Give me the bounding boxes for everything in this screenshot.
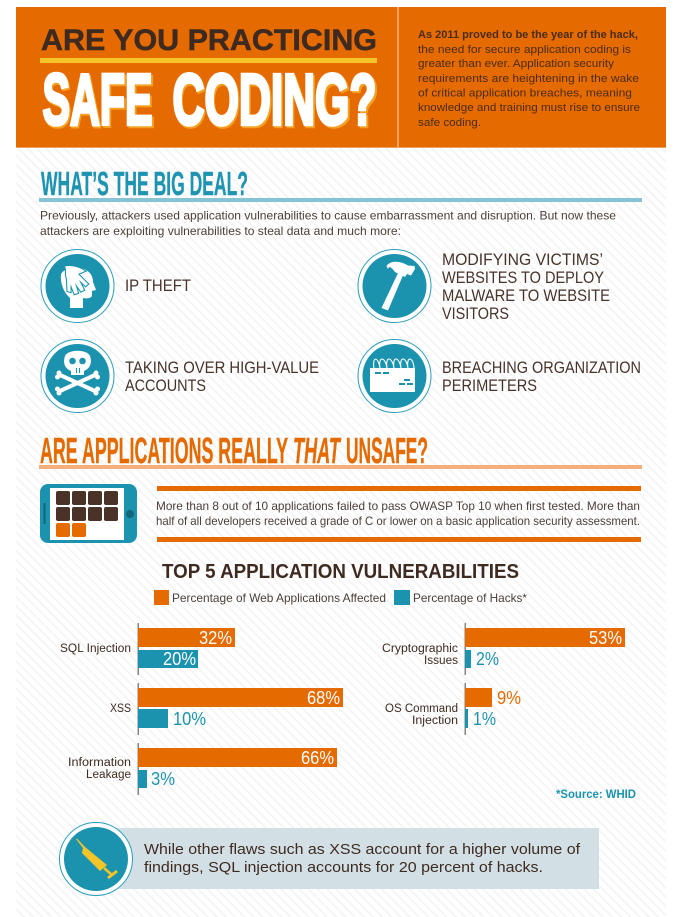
bars: os command injection: Injection bbox=[412, 715, 458, 727]
text block: intro: safe coding. bbox=[418, 117, 481, 129]
axes bbox=[138, 623, 466, 795]
label: breaching perimeters bbox=[442, 359, 641, 395]
panel: title banner bbox=[16, 7, 666, 148]
bars: sql injection bbox=[60, 628, 235, 669]
source note: *Source: WHID bbox=[556, 789, 636, 801]
text: takeaway bbox=[144, 841, 581, 876]
label: modifying websites: WEBSITES TO DEPLOY bbox=[442, 269, 604, 287]
section: are applications really that unsafe bbox=[39, 430, 642, 543]
bars: information leakage: 66% bbox=[301, 748, 334, 768]
text block: intro: As 2011 proved to be the year of the hack, bbox=[418, 29, 638, 41]
bars: cryptographic issues: 53% bbox=[589, 628, 622, 648]
heading: safe coding: SAFE bbox=[42, 60, 152, 140]
heading: safe coding: CODING? bbox=[174, 62, 378, 142]
text block: summary: Previously, attackers used application vulnerabilities to cause embarrassment and disruption. But now these bbox=[40, 208, 616, 222]
bars: xss: XSS bbox=[110, 703, 131, 715]
bars: os command injection: OS Command bbox=[385, 703, 458, 715]
bars: cryptographic issues: 2% bbox=[476, 649, 499, 669]
section: are applications really that unsafe: UNSAFE? bbox=[346, 430, 428, 471]
heading: what's the big deal: WHAT’S THE BIG DEAL? bbox=[41, 165, 248, 202]
label: modifying websites: VISITORS bbox=[442, 305, 509, 323]
text: takeaway: While other flaws such as XSS account for a higher volume of bbox=[144, 841, 581, 858]
bars: xss bbox=[110, 688, 343, 729]
icon: tablet bbox=[40, 484, 137, 543]
callout: owasp statistic bbox=[156, 486, 641, 542]
section: what's the big deal bbox=[39, 165, 642, 412]
legend: Percentage of Hacks* bbox=[413, 591, 527, 605]
bars: sql injection: 32% bbox=[199, 628, 232, 648]
callout: owasp statistic: half of all developers received a grade of C or lower on a basic application security assessment. bbox=[156, 514, 640, 528]
heading: safe coding bbox=[42, 60, 378, 142]
bars: information leakage: Information bbox=[68, 757, 131, 769]
legend bbox=[154, 590, 527, 605]
label: taking over accounts: TAKING OVER HIGH-VALUE bbox=[125, 359, 319, 377]
label: ip theft: IP THEFT bbox=[125, 277, 191, 295]
heading: are applications really that unsafe: THAT bbox=[293, 430, 342, 471]
text block: intro: knowledge and training must rise to ensure bbox=[418, 102, 640, 114]
bars: information leakage bbox=[68, 748, 337, 789]
bars: cryptographic issues: Cryptographic bbox=[382, 643, 458, 655]
bars: os command injection bbox=[385, 688, 521, 729]
callout: owasp statistic: More than 8 out of 10 applications failed to pass OWASP Top 10 when first tested. More than bbox=[156, 499, 640, 513]
bars: information leakage: 3% bbox=[151, 769, 175, 789]
bars: cryptographic issues: Issues bbox=[424, 655, 458, 667]
text: takeaway: findings, SQL injection accounts for 20 percent of hacks. bbox=[144, 859, 543, 876]
text block: summary bbox=[40, 208, 616, 238]
bars: os command injection: 1% bbox=[473, 709, 496, 729]
label: modifying websites: MALWARE TO WEBSITE bbox=[442, 287, 610, 305]
legend: Percentage of Web Applications Affected bbox=[172, 591, 386, 605]
text block: intro: requirements are heightening in the wake bbox=[418, 73, 639, 85]
text block: summary: attackers are exploiting vulnerabilities to steal data and much more: bbox=[40, 224, 401, 238]
label: modifying websites bbox=[442, 251, 610, 323]
divider: yellow rule bbox=[40, 58, 377, 63]
text block: intro: of critical application breaches, meaning bbox=[418, 88, 632, 100]
label: modifying websites: MODIFYING VICTIMS’ bbox=[442, 251, 603, 269]
bars: information leakage: Leakage bbox=[86, 769, 131, 781]
text block: intro bbox=[418, 29, 640, 129]
icon: perimeter wall bbox=[358, 340, 431, 412]
icon: syringe bbox=[60, 822, 132, 896]
bars: sql injection: SQL Injection bbox=[60, 643, 131, 655]
callout: sql injection takeaway bbox=[60, 822, 599, 896]
bars: cryptographic issues bbox=[382, 628, 625, 669]
heading: are you practicing: ARE YOU PRACTICING bbox=[41, 24, 377, 57]
icon: hammer bbox=[358, 250, 431, 322]
bars: xss: 68% bbox=[307, 688, 340, 708]
icon: skull and crossbones bbox=[41, 340, 114, 412]
heading: safe coding: CODING? bbox=[172, 60, 376, 140]
label: breaching perimeters: PERIMETERS bbox=[442, 377, 537, 395]
text block: intro: greater than ever. Application security bbox=[418, 58, 615, 70]
bars: os command injection: 9% bbox=[497, 688, 521, 708]
label: taking over accounts bbox=[125, 359, 319, 395]
label: breaching perimeters: BREACHING ORGANIZATION bbox=[442, 359, 641, 377]
bars: xss: 10% bbox=[173, 709, 206, 729]
bars: sql injection: 20% bbox=[163, 649, 196, 669]
text block: intro: the need for secure application coding is bbox=[418, 44, 632, 56]
icon: head with hand bbox=[41, 250, 114, 322]
chart: top 5 application vulnerabilities bbox=[60, 561, 636, 801]
label: taking over accounts: ACCOUNTS bbox=[125, 377, 206, 395]
chart title: TOP 5 APPLICATION VULNERABILITIES bbox=[162, 561, 519, 583]
heading: safe coding: SAFE bbox=[44, 62, 154, 142]
heading: are applications really that unsafe: ARE APPLICATIONS REALLY bbox=[40, 430, 288, 471]
